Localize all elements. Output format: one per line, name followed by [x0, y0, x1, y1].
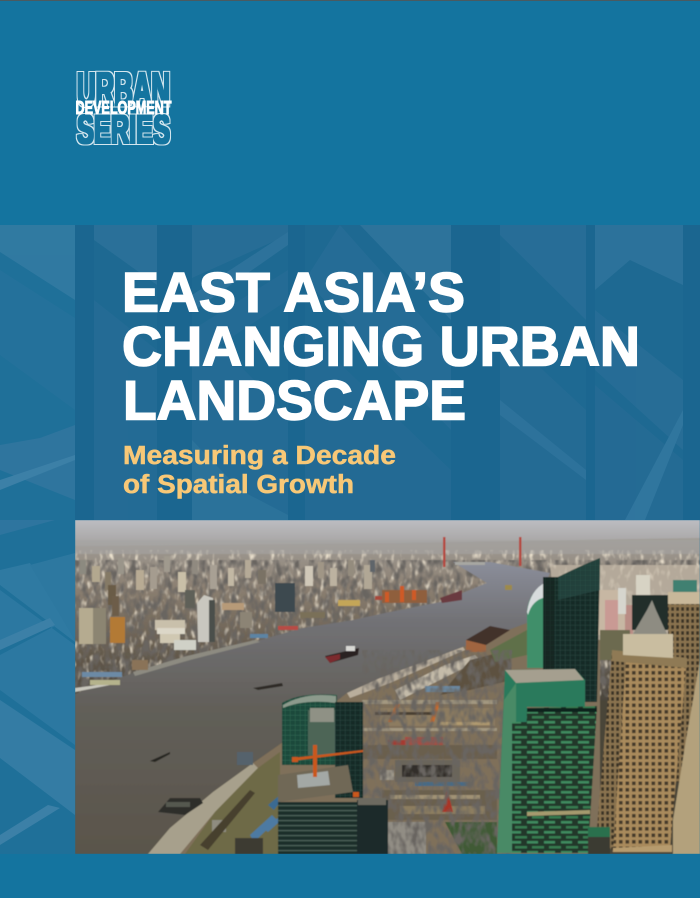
tower: tan crown building	[588, 600, 687, 854]
photo: aerial view of Shanghai riverfront	[75, 520, 700, 854]
far-side towers	[79, 583, 298, 685]
crane	[292, 745, 363, 797]
sky	[75, 520, 700, 546]
logo word: DEVELOPMENT: DEVELOPMENT	[76, 98, 172, 118]
title: EAST ASIA’S	[122, 260, 465, 324]
logo word: SERIES: SERIES	[77, 108, 170, 152]
tower: front building with roof	[278, 765, 388, 854]
background towers right	[598, 574, 700, 782]
tower: cylindrical dark glass under construction	[282, 694, 363, 798]
logo: Urban Development Series	[76, 62, 172, 152]
logo word: URBAN: URBAN	[77, 62, 170, 116]
right-side land behind towers	[550, 564, 700, 640]
tower: pale foreground right edge	[673, 660, 700, 854]
tower: curved dark glass	[527, 558, 600, 702]
photo base	[600, 700, 680, 854]
right distance: port and bridge	[382, 537, 522, 603]
title: CHANGING URBAN	[122, 314, 640, 378]
near bank construction site	[148, 623, 600, 854]
title: LANDSCAPE	[123, 368, 466, 432]
title	[122, 260, 640, 432]
far buildings	[80, 560, 86, 567]
architectural lattice overlay	[94, 225, 700, 520]
near-bank embankment highlights	[75, 684, 110, 693]
tower: green glass foreground	[497, 669, 597, 853]
subtitle	[123, 442, 396, 499]
panel: left architectural pattern strip	[0, 225, 75, 854]
panel: central title band	[75, 225, 700, 520]
river Huangpu	[75, 562, 550, 854]
subtitle: of Spatial Growth	[123, 471, 354, 499]
subtitle: Measuring a Decade	[123, 442, 396, 470]
ships and barges	[150, 646, 359, 815]
far bank city	[75, 538, 700, 700]
